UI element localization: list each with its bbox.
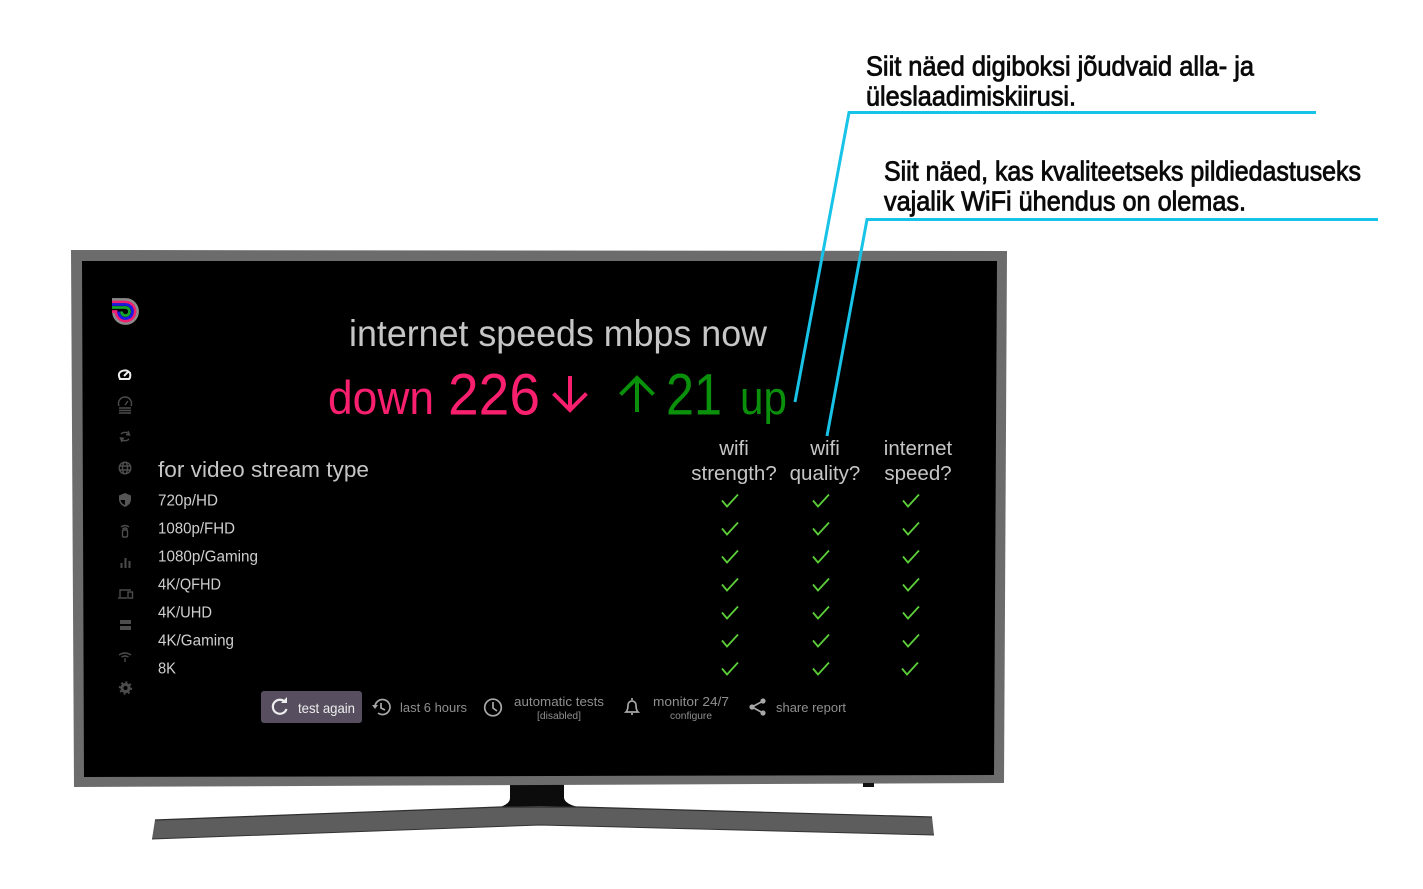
stream type labels: 4K/UHD	[158, 604, 212, 622]
icon: settings gear	[120, 682, 131, 694]
icon: gauge history	[118, 397, 132, 413]
icon: up arrow	[620, 378, 654, 412]
power indicator	[863, 783, 874, 787]
automatic tests	[485, 694, 605, 722]
stream type labels: 720p/HD	[158, 492, 218, 510]
column header: wifi strength	[691, 437, 777, 485]
tv stand	[152, 784, 934, 839]
stream type labels: 8K	[158, 660, 177, 678]
share report: share report	[776, 700, 846, 715]
upload speed	[620, 362, 787, 428]
stream type labels: 1080p/Gaming	[158, 548, 258, 566]
upload speed: 21	[666, 362, 722, 428]
tv screen	[82, 261, 997, 777]
icon: down arrow	[554, 376, 586, 410]
test again button	[261, 691, 362, 723]
automatic tests: [disabled]	[537, 711, 581, 722]
icon: servers	[120, 620, 131, 630]
callout text: wifi: Siit näed, kas kvaliteetseks pildiedastuseks	[884, 156, 1361, 186]
icon: wifi device	[121, 526, 129, 537]
title: internet speeds mbps now	[349, 313, 767, 354]
download speed	[328, 362, 586, 428]
last 6 hours	[372, 700, 467, 715]
sidebar navigation icons	[118, 370, 132, 694]
icon: devices	[118, 590, 132, 598]
check marks	[722, 494, 919, 674]
callout: wifi leader line	[827, 220, 1378, 436]
column header: wifi strength: strength?	[691, 462, 777, 485]
callout text: wifi: vajalik WiFi ühendus on olemas.	[884, 186, 1246, 216]
share report	[749, 698, 846, 716]
column header: wifi quality	[790, 437, 860, 485]
icon: globe	[119, 462, 131, 474]
column header: internet speed	[884, 437, 952, 485]
app logo	[112, 300, 138, 324]
icon: bars	[120, 558, 130, 568]
download speed: down	[328, 371, 434, 424]
stream type labels: 1080p/FHD	[158, 520, 235, 538]
test again button: test again	[298, 700, 355, 716]
icon: refresh	[120, 431, 130, 442]
monitor 24/7: configure	[670, 711, 712, 722]
last 6 hours: last 6 hours	[400, 700, 467, 715]
stream type labels: 4K/Gaming	[158, 632, 234, 650]
column header: wifi quality: quality?	[790, 462, 860, 485]
table heading: for video stream type	[158, 457, 369, 482]
stream type labels	[158, 492, 258, 678]
column header: internet speed: internet	[884, 437, 952, 460]
column header: internet speed: speed?	[884, 462, 952, 485]
callout text: wifi	[884, 156, 1361, 216]
callout text: speeds: üleslaadimiskiirusi.	[866, 80, 1076, 112]
automatic tests: automatic tests	[514, 694, 605, 709]
stream type labels: 4K/QFHD	[158, 576, 221, 594]
monitor 24/7	[626, 694, 729, 722]
icon: speed gauge active	[119, 370, 130, 379]
upload speed: up	[740, 371, 787, 424]
monitor 24/7: monitor 24/7	[653, 694, 729, 709]
download speed: 226	[448, 362, 540, 428]
icon: shield	[119, 493, 131, 507]
callout text: speeds	[866, 50, 1254, 112]
callout: speeds leader line	[795, 112, 1316, 402]
callout text: speeds: Siit näed digiboksi jõudvaid alla- ja	[866, 50, 1254, 82]
column header: wifi quality: wifi	[809, 437, 840, 460]
icon: wifi	[119, 653, 131, 662]
column header: wifi strength: wifi	[718, 437, 749, 460]
tv bezel	[71, 250, 1007, 787]
